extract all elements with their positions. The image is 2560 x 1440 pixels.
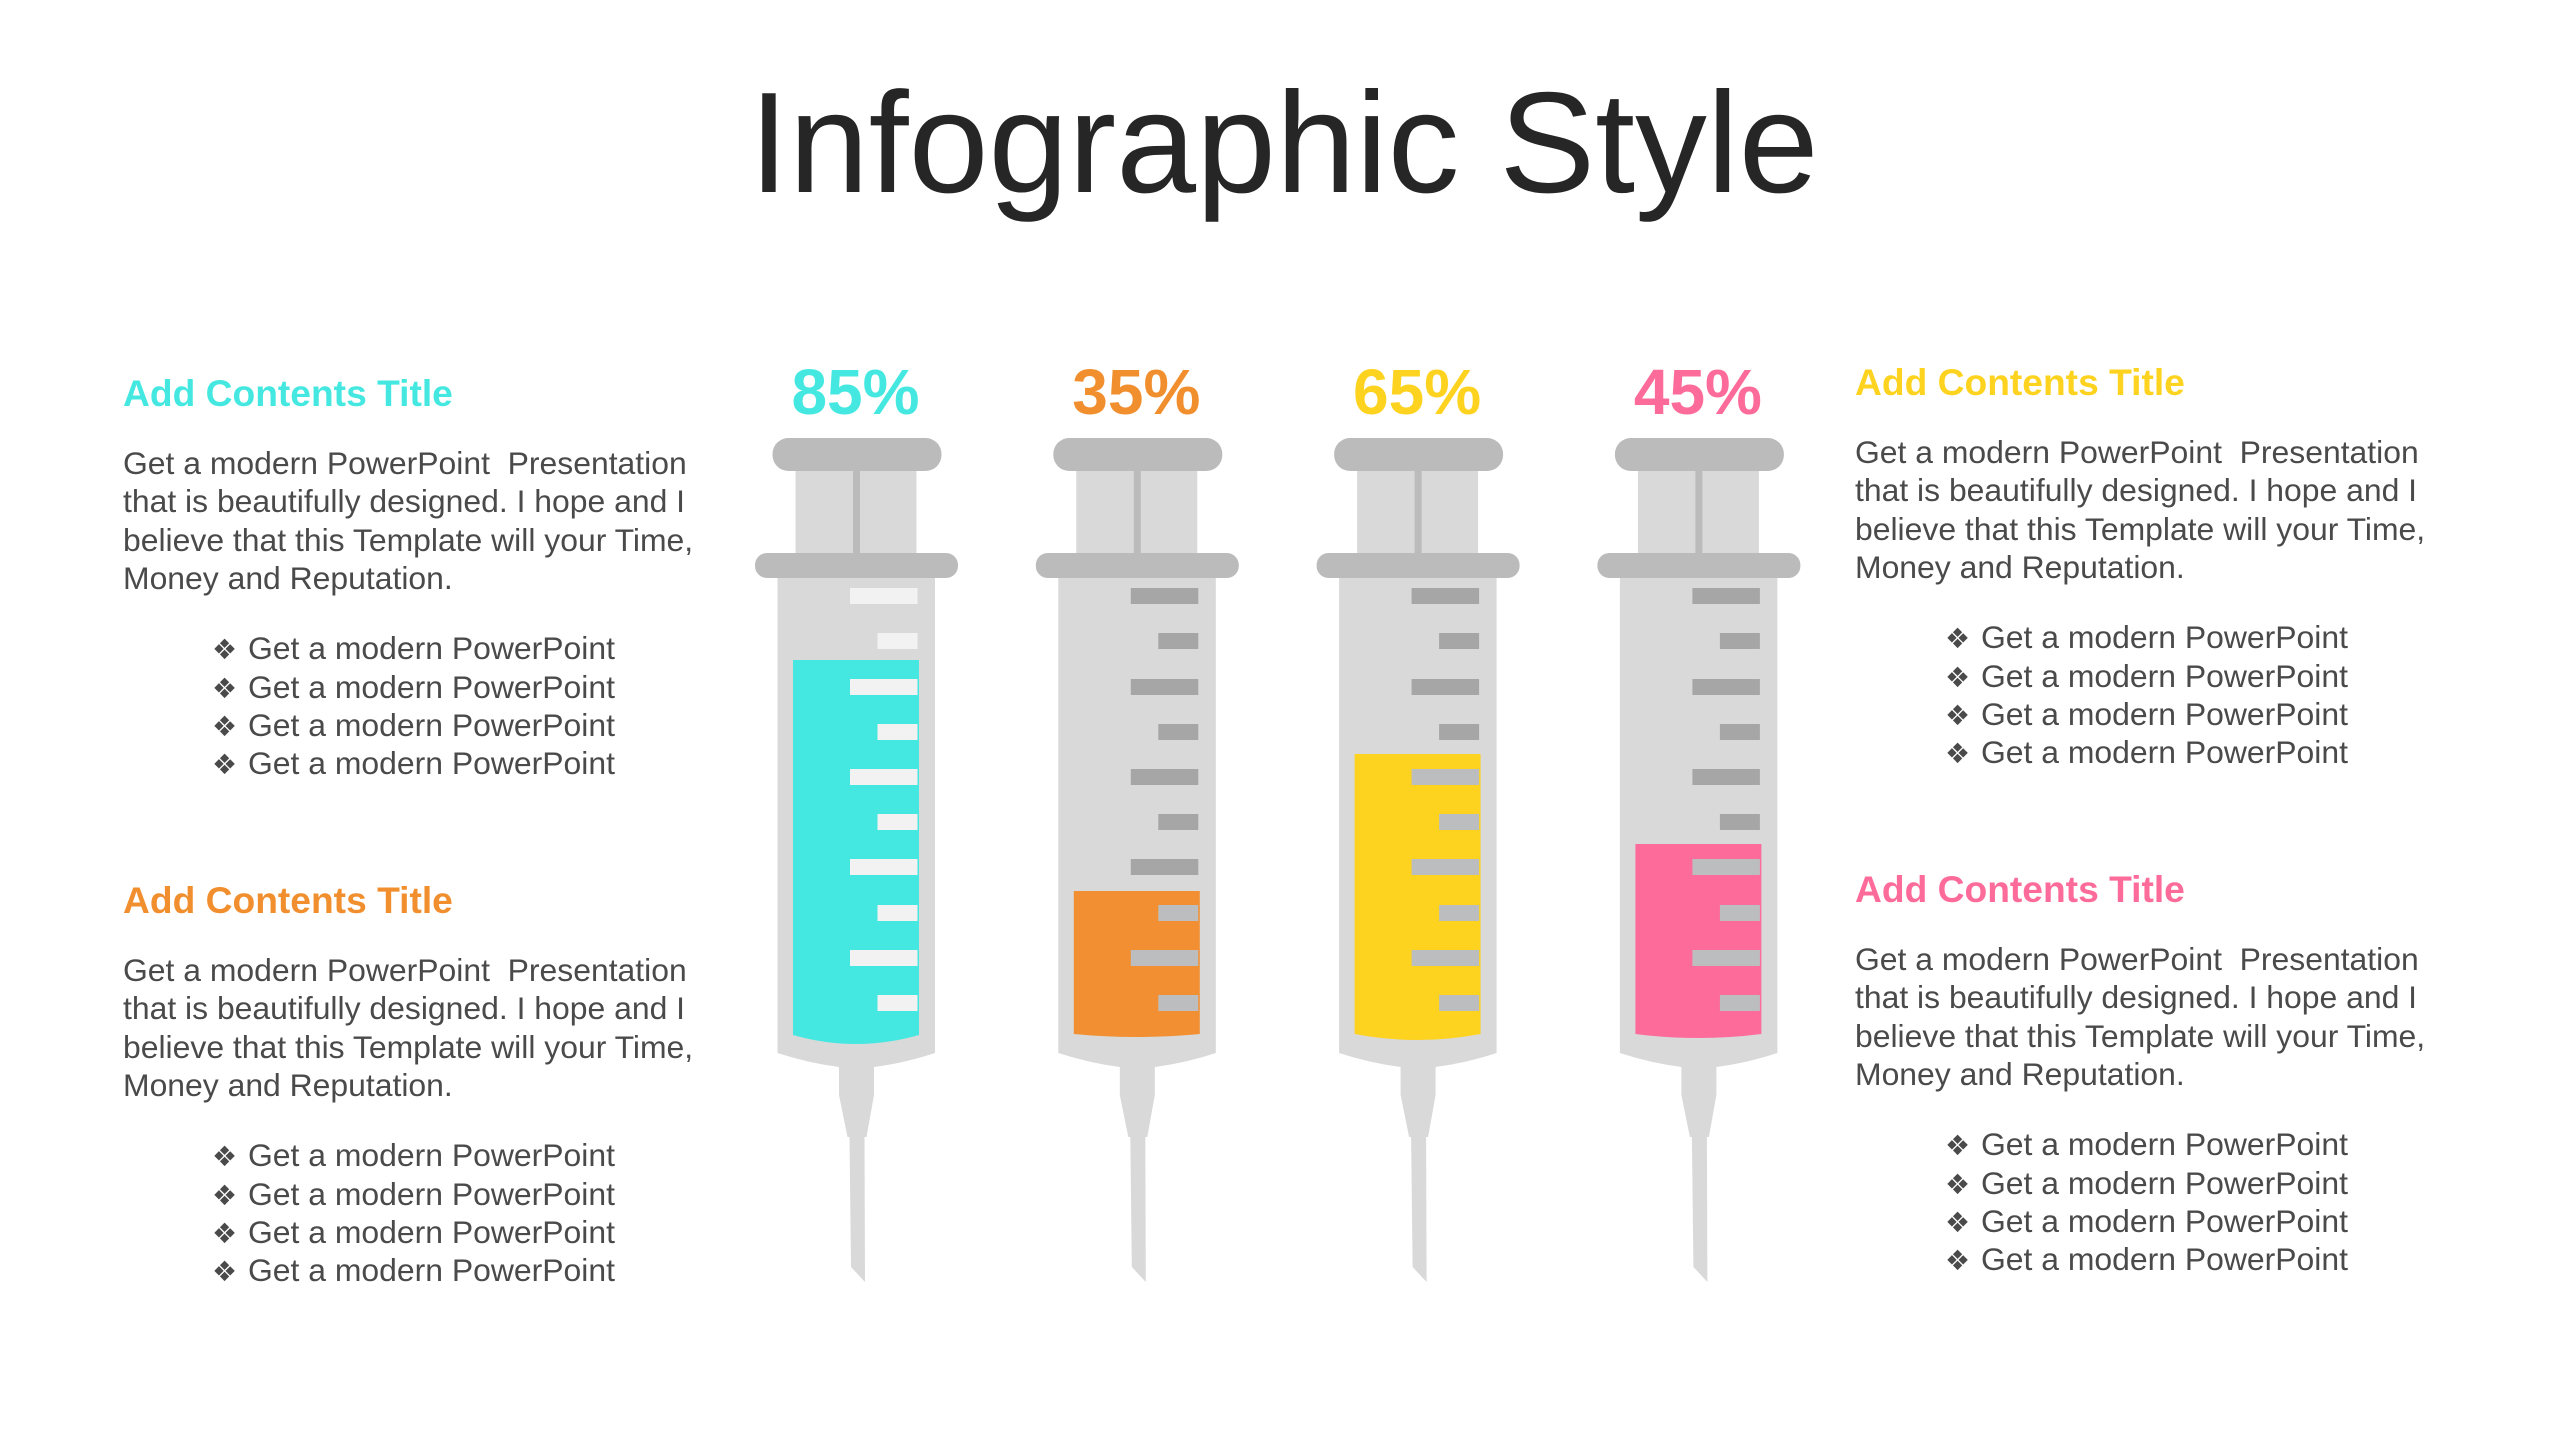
bullet list: cyan: ❖: [212, 748, 237, 781]
bullet list: orange: Get a modern PowerPoint: [248, 1252, 615, 1288]
body text: pink: [1855, 941, 2425, 1092]
barrel and needle: [1058, 570, 1216, 1282]
bullet list: cyan: Get a modern PowerPoint: [248, 630, 615, 666]
bullet list: pink: Get a modern PowerPoint: [1981, 1165, 2348, 1201]
bullet list: yellow: Get a modern PowerPoint: [1981, 734, 2348, 770]
liquid fill: 65%: [1355, 754, 1481, 1040]
value label: 85%: 85%: [791, 356, 920, 428]
barrel and needle: [1620, 570, 1777, 1282]
bullet list: pink: Get a modern PowerPoint: [1981, 1203, 2348, 1239]
syringe chart: 85%: [755, 356, 958, 1282]
bullet list: orange: Get a modern PowerPoint: [248, 1214, 615, 1250]
scale ticks: [1692, 588, 1760, 1011]
heading: yellow: Add Contents Title: [1855, 361, 2185, 403]
body text: cyan: Money and Reputation.: [123, 560, 453, 596]
body text: pink: Get a modern PowerPoint Presentation: [1855, 941, 2419, 977]
bullet list: pink: ❖: [1945, 1244, 1970, 1277]
liquid fill: 45%: [1635, 844, 1761, 1038]
bullet list: orange: Get a modern PowerPoint: [248, 1137, 615, 1173]
body text: yellow: [1855, 434, 2425, 585]
syringe chart: 35%: [1036, 356, 1239, 1282]
bullet list: cyan: ❖: [212, 633, 237, 666]
plunger: [1053, 438, 1222, 557]
panel: yellow text block: [1855, 361, 2425, 770]
plunger: [1334, 438, 1503, 557]
body text: pink: Money and Reputation.: [1855, 1056, 2185, 1092]
bullet list: pink: [1945, 1126, 2348, 1277]
body text: cyan: Get a modern PowerPoint Presentation: [123, 445, 687, 481]
body text: yellow: Get a modern PowerPoint Presentation: [1855, 434, 2419, 470]
plunger: [772, 438, 942, 557]
body text: yellow: Money and Reputation.: [1855, 549, 2185, 585]
flange: [1317, 553, 1520, 578]
heading: pink: Add Contents Title: [1855, 868, 2185, 910]
bullet list: pink: Get a modern PowerPoint: [1981, 1241, 2348, 1277]
bullet list: yellow: ❖: [1945, 737, 1970, 770]
bullet list: yellow: [1945, 619, 2348, 770]
scale ticks: [1412, 588, 1479, 1011]
bullet list: cyan: Get a modern PowerPoint: [248, 707, 615, 743]
flange: [755, 553, 958, 578]
value label: 45%: 45%: [1634, 356, 1762, 428]
body text: pink: that is beautifully designed. I hope and I: [1855, 979, 2417, 1015]
plunger: [1615, 438, 1784, 557]
syringe chart: 65%: [1317, 356, 1520, 1282]
bullet list: pink: ❖: [1945, 1168, 1970, 1201]
bullet list: yellow: Get a modern PowerPoint: [1981, 696, 2348, 732]
bullet list: yellow: Get a modern PowerPoint: [1981, 658, 2348, 694]
heading: cyan: Add Contents Title: [123, 372, 453, 414]
bullet list: cyan: ❖: [212, 672, 237, 705]
bullet list: orange: ❖: [212, 1179, 237, 1212]
panel: cyan text block: [123, 372, 693, 781]
bullet list: cyan: [212, 630, 615, 781]
syringe chart: 45%: [1597, 356, 1800, 1282]
barrel and needle: [1339, 570, 1497, 1282]
body text: cyan: believe that this Template will your Time,: [123, 522, 693, 558]
body text: pink: believe that this Template will your Time,: [1855, 1018, 2425, 1054]
bullet list: yellow: ❖: [1945, 661, 1970, 694]
scale ticks: [850, 588, 918, 1011]
bullet list: orange: ❖: [212, 1217, 237, 1250]
bullet list: cyan: ❖: [212, 710, 237, 743]
bullet list: yellow: ❖: [1945, 622, 1970, 655]
title: Infographic Style: [749, 63, 1819, 223]
body text: cyan: that is beautifully designed. I hope and I: [123, 483, 685, 519]
bullet list: cyan: Get a modern PowerPoint: [248, 745, 615, 781]
barrel and needle: [778, 570, 935, 1282]
panel: orange text block: [123, 879, 693, 1288]
bullet list: orange: Get a modern PowerPoint: [248, 1176, 615, 1212]
body text: orange: believe that this Template will your Time,: [123, 1029, 693, 1065]
heading: orange: Add Contents Title: [123, 879, 453, 921]
flange: [1036, 553, 1239, 578]
bullet list: cyan: Get a modern PowerPoint: [248, 669, 615, 705]
body text: orange: [123, 952, 693, 1103]
bullet list: yellow: ❖: [1945, 699, 1970, 732]
panel: pink text block: [1855, 868, 2425, 1277]
bullet list: yellow: Get a modern PowerPoint: [1981, 619, 2348, 655]
scale ticks: [1131, 588, 1198, 1011]
flange: [1597, 553, 1800, 578]
value label: 65%: 65%: [1353, 356, 1481, 428]
body text: orange: Money and Reputation.: [123, 1067, 453, 1103]
body text: cyan: [123, 445, 693, 596]
value label: 35%: 35%: [1072, 356, 1200, 428]
bullet list: orange: ❖: [212, 1255, 237, 1288]
bullet list: orange: ❖: [212, 1140, 237, 1173]
body text: orange: that is beautifully designed. I hope and I: [123, 990, 685, 1026]
body text: orange: Get a modern PowerPoint Presentation: [123, 952, 687, 988]
bullet list: pink: ❖: [1945, 1206, 1970, 1239]
liquid fill: 85%: [793, 660, 919, 1044]
bullet list: pink: ❖: [1945, 1129, 1970, 1162]
bullet list: orange: [212, 1137, 615, 1288]
liquid fill: 35%: [1074, 891, 1200, 1037]
body text: yellow: believe that this Template will your Time,: [1855, 511, 2425, 547]
bullet list: pink: Get a modern PowerPoint: [1981, 1126, 2348, 1162]
body text: yellow: that is beautifully designed. I hope and I: [1855, 472, 2417, 508]
